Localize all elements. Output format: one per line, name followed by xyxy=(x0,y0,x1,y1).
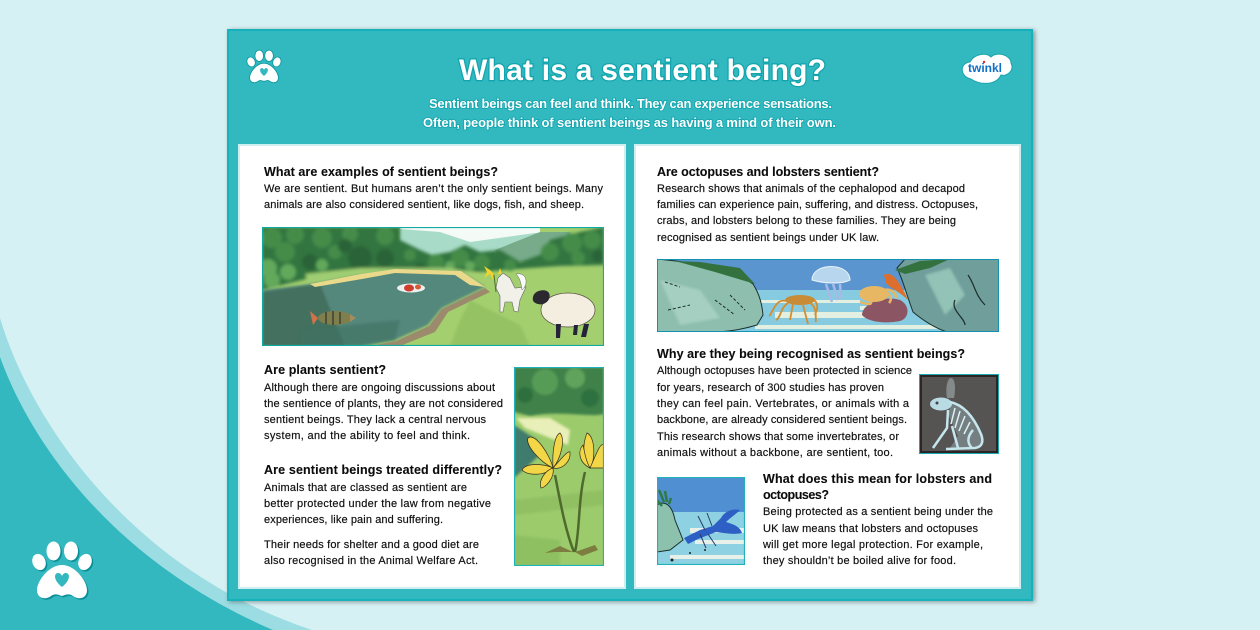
text block: what this means: will get more legal protection. For example, xyxy=(762,539,983,551)
icon: corner paw xyxy=(30,542,96,600)
text block: why recognised: This research shows that some invertebrates, or xyxy=(657,431,899,443)
icon: koi xyxy=(397,284,425,292)
icon: yellow flower xyxy=(484,266,502,292)
illustration: yellow flowers xyxy=(514,367,604,566)
icon: orange fish xyxy=(884,274,908,300)
text block: examples of sentient beings: We are sentient. But humans aren’t the only sentient beings. Many xyxy=(264,183,604,195)
subtitle: Often, people think of sentient beings as having a mind of their own. xyxy=(423,115,836,130)
text block: are plants sentient xyxy=(264,363,503,442)
logo: twinkl xyxy=(962,54,1012,83)
text block: examples of sentient beings: animals are also considered sentient, like dogs, fish, and sheep. xyxy=(264,199,584,211)
corner curve teal xyxy=(0,357,273,630)
text block: octopuses and lobsters: recognised as sentient beings under UK law. xyxy=(657,232,879,244)
illustration: x-ray rabbit xyxy=(919,374,999,454)
subtitle: Sentient beings can feel and think. They can experience sensations. xyxy=(429,96,832,111)
text block: are plants sentient: system, and the ability to feel and think. xyxy=(264,430,470,442)
text block: octopuses and lobsters: Research shows that animals of the cephalopod and decapod xyxy=(657,183,965,195)
illustration: blue lobster xyxy=(657,477,745,565)
panel: left column xyxy=(239,145,625,588)
text block: why recognised: for years, research of 300 studies has proven xyxy=(657,382,884,394)
text block: why recognised: they can feel pain. Vertebrates, or animals with a xyxy=(657,398,910,410)
icon: sheep xyxy=(533,290,595,338)
text block: treated differently: Are sentient beings treated differently? xyxy=(264,463,502,477)
text block: are plants sentient: sentient beings. They lack a central nervous xyxy=(264,414,486,426)
illustration: pond with fish, dog and sheep xyxy=(259,226,604,346)
text block: what this means: What does this mean for lobsters and xyxy=(763,472,992,486)
text block: octopuses and lobsters: crabs, and lobsters belong to these families. They are being xyxy=(657,215,956,227)
subtitle xyxy=(423,96,836,130)
text block: treated differently: Animals that are classed as sentient are xyxy=(264,482,467,494)
text block: why recognised: Why are they being recognised as sentient beings? xyxy=(657,347,965,361)
text block: why recognised: animals without a backbone, are sentient, too. xyxy=(657,447,893,459)
icon: octopus xyxy=(859,286,896,304)
panel: right column xyxy=(635,145,1020,588)
title: What is a sentient being? xyxy=(459,54,826,87)
text block: are plants sentient: Are plants sentient? xyxy=(264,363,386,377)
icon: crab xyxy=(769,295,817,324)
icon: header paw xyxy=(246,50,282,82)
text block: are plants sentient: Although there are ongoing discussions about xyxy=(264,382,495,394)
text block: why recognised: Although octopuses have been protected in science xyxy=(657,365,912,377)
text block: treated differently xyxy=(264,463,502,567)
text block: what this means xyxy=(762,472,993,567)
corner curve band xyxy=(0,318,312,630)
text block: why recognised xyxy=(657,347,965,459)
icon: jellyfish xyxy=(812,266,850,302)
illustration: sea creatures xyxy=(657,259,999,332)
text block: examples of sentient beings xyxy=(264,165,604,211)
icon: dog xyxy=(496,273,526,312)
icon: perch xyxy=(310,311,356,325)
text block: octopuses and lobsters: families can experience pain, suffering, and distress. Octopuses, xyxy=(657,199,978,211)
rock under octopus xyxy=(862,298,908,322)
text block: octopuses and lobsters: Are octopuses and lobsters sentient? xyxy=(657,165,879,179)
text block: examples of sentient beings: What are examples of sentient beings? xyxy=(264,165,498,179)
text block: octopuses and lobsters xyxy=(657,165,978,244)
logo: twinkl: twinkl xyxy=(968,61,1002,75)
text block: treated differently: better protected under the law from negative xyxy=(264,498,491,510)
text block: what this means: octopuses? xyxy=(763,488,829,502)
text block: treated differently: Their needs for shelter and a good diet are xyxy=(264,539,479,551)
text block: what this means: Being protected as a sentient being under the xyxy=(763,506,993,518)
text block: what this means: UK law means that lobsters and octopuses xyxy=(763,523,978,535)
text block: what this means: they shouldn’t be boiled alive for food. xyxy=(763,555,956,567)
text block: treated differently: also recognised in the Animal Welfare Act. xyxy=(264,555,478,567)
main poster panel xyxy=(228,30,1032,600)
text block: are plants sentient: the sentience of plants, they are not considered xyxy=(264,398,503,410)
text block: treated differently: experiences, like pain and suffering. xyxy=(264,514,443,526)
text block: why recognised: backbone, are already considered sentient beings. xyxy=(657,414,907,426)
